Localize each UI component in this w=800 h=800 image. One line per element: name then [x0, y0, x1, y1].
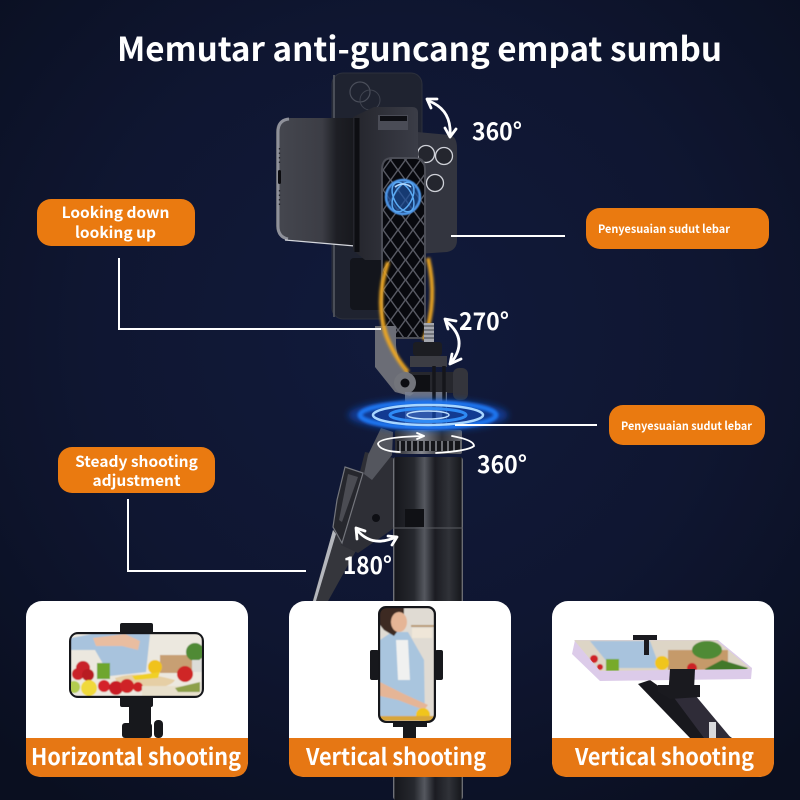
- orange label band: [26, 738, 248, 777]
- product: tripod selfie stick with phone: [276, 73, 508, 800]
- label: 180: 180°: [343, 546, 392, 581]
- arrow: collar 360: [378, 433, 474, 453]
- rotating collar: [395, 430, 462, 454]
- callout: wide angle middle: Penyesuaian sudut lebar: [621, 418, 753, 434]
- label: 360 collar: 360°: [477, 445, 527, 480]
- callout: wide angle top: Penyesuaian sudut lebar: [598, 221, 731, 237]
- rotation arrows: [356, 99, 474, 545]
- orange label band: [289, 738, 511, 777]
- label: Vertical shooting: [305, 738, 486, 772]
- label: 360 top: 360°: [472, 112, 522, 147]
- lattice arm: [375, 158, 428, 396]
- callout: steady shooting adjustment: [58, 447, 215, 493]
- ball head mount: [394, 323, 468, 428]
- connector: looking down: [119, 258, 381, 329]
- arrow: 270: [445, 319, 461, 364]
- back phone, rear view: [332, 73, 457, 319]
- blue magnetic glow: [386, 179, 420, 215]
- pole latch: [405, 509, 424, 527]
- tripod head mini: [120, 623, 163, 738]
- panel: horizontal shooting: [26, 601, 248, 777]
- tilted phone: [570, 640, 755, 681]
- phone clamp: [353, 107, 418, 260]
- label: Horizontal shooting: [31, 738, 241, 772]
- panel: vertical shooting: [289, 601, 511, 777]
- connector: steady shooting: [128, 499, 306, 571]
- orange label band: [552, 738, 774, 777]
- phone with woman: [378, 606, 436, 723]
- callout: wide angle top: [586, 208, 769, 249]
- tilted arm: [638, 680, 732, 738]
- connector: wide angle top: [451, 235, 565, 237]
- label: 270: 270°: [459, 302, 509, 337]
- glow ellipse: gold: [381, 258, 432, 372]
- callout: steady shooting adjustment: adjustment: [92, 469, 181, 491]
- callout: looking down looking up: looking up: [75, 221, 156, 243]
- front phone, side view: [276, 118, 360, 246]
- connector: wide angle middle: [455, 424, 597, 426]
- callout: wide angle middle: [609, 405, 765, 445]
- tripod leg: [312, 428, 394, 603]
- side clamps: [370, 650, 443, 738]
- blue ripple rings: [348, 399, 508, 431]
- panel: vertical shooting tilted: [552, 601, 774, 777]
- phone with food scene: [68, 632, 204, 698]
- callout: looking down looking up: [37, 199, 195, 246]
- phone holder: [633, 635, 700, 699]
- arrow: 180: [356, 528, 397, 545]
- pole: [393, 457, 463, 800]
- callout: looking down looking up: Looking down: [62, 201, 169, 223]
- arrow: top 360: [427, 99, 456, 137]
- label: Vertical shooting: [574, 738, 754, 772]
- title: Memutar anti-guncang empat sumbu: [117, 23, 722, 71]
- callout: steady shooting adjustment: Steady shooting: [75, 450, 198, 472]
